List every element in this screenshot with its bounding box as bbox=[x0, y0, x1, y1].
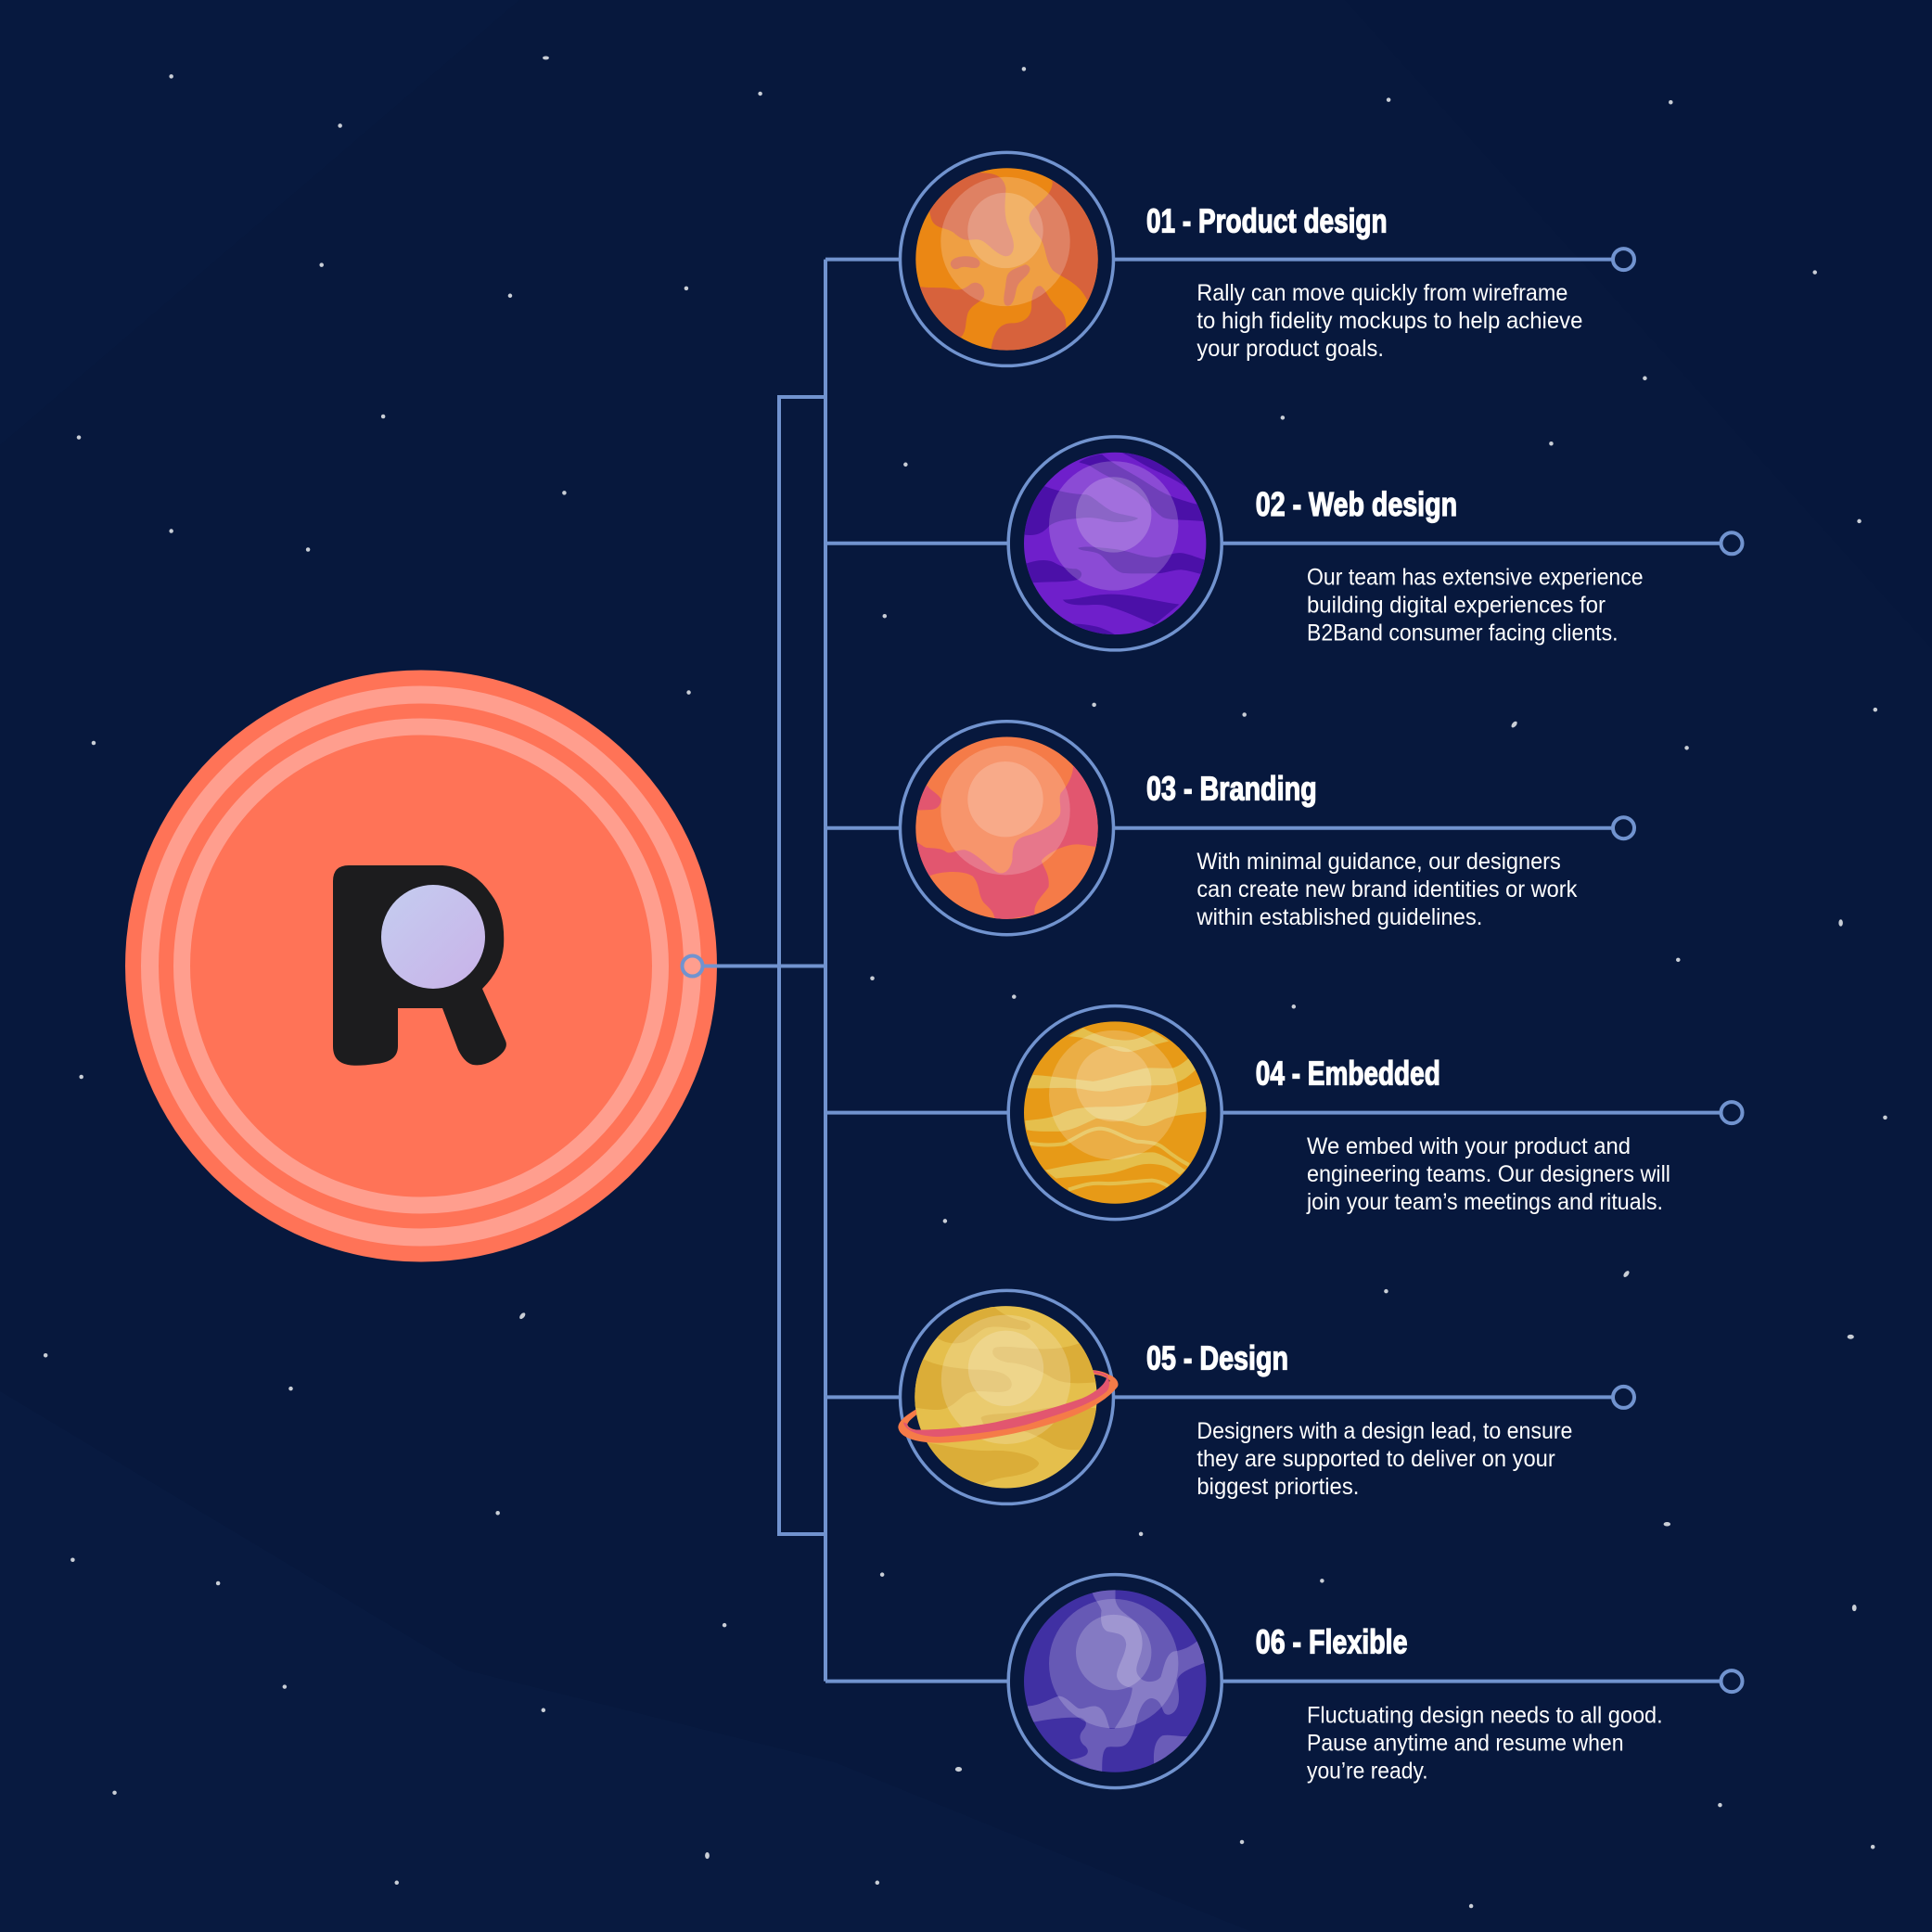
planet: orange bbox=[900, 152, 1113, 365]
description: biggest priorties. bbox=[1196, 1474, 1359, 1500]
description: Pause anytime and resume when bbox=[1307, 1731, 1623, 1757]
central sun badge with logo bbox=[125, 670, 717, 1261]
description: Fluctuating design needs to all good. bbox=[1307, 1703, 1663, 1729]
item 02: web design bbox=[1008, 437, 1742, 650]
connector line bbox=[1113, 826, 1613, 830]
description bbox=[1196, 849, 1578, 930]
heading: 06 - Flexible bbox=[1256, 1623, 1408, 1661]
item 05: design bbox=[898, 1290, 1634, 1503]
heading: 04 - Embedded bbox=[1256, 1055, 1440, 1093]
item 04: embedded bbox=[1008, 1006, 1742, 1220]
description bbox=[1307, 564, 1644, 646]
description: engineering teams. Our designers will bbox=[1307, 1161, 1670, 1187]
connector line bbox=[1222, 542, 1721, 545]
description: Rally can move quickly from wireframe bbox=[1196, 280, 1567, 306]
item 01: product design bbox=[900, 152, 1634, 365]
description: join your team’s meetings and rituals. bbox=[1306, 1189, 1663, 1215]
description: they are supported to deliver on your bbox=[1196, 1446, 1555, 1472]
planet: ringed gold bbox=[898, 1290, 1119, 1503]
connector tree bbox=[683, 260, 1010, 1682]
heading: 05 - Design bbox=[1146, 1338, 1288, 1376]
end circle bbox=[1721, 1670, 1742, 1692]
item 03: branding bbox=[900, 722, 1634, 935]
planet: indigo bbox=[1008, 1575, 1222, 1788]
description: to high fidelity mockups to help achieve bbox=[1196, 308, 1582, 334]
end circle bbox=[1613, 249, 1634, 270]
description bbox=[1196, 1418, 1572, 1500]
planet: purple bbox=[1008, 437, 1222, 650]
description bbox=[1196, 280, 1582, 362]
description: With minimal guidance, our designers bbox=[1196, 849, 1561, 875]
description: B2Band consumer facing clients. bbox=[1307, 620, 1618, 646]
description: your product goals. bbox=[1196, 336, 1384, 362]
description: We embed with your product and bbox=[1307, 1133, 1631, 1159]
heading: 02 - Web design bbox=[1256, 485, 1457, 523]
connector line bbox=[1222, 1680, 1721, 1683]
planet: amber striped bbox=[1008, 1006, 1222, 1220]
description: Our team has extensive experience bbox=[1307, 564, 1644, 590]
planet: coral bbox=[900, 722, 1113, 935]
logo R bbox=[333, 865, 506, 1066]
description: building digital experiences for bbox=[1307, 592, 1606, 618]
description bbox=[1307, 1703, 1663, 1785]
connector line bbox=[1113, 1395, 1613, 1399]
end circle bbox=[1613, 817, 1634, 838]
item 06: flexible bbox=[1008, 1575, 1742, 1788]
description: you’re ready. bbox=[1307, 1759, 1428, 1785]
planet ring front bbox=[898, 1375, 1119, 1443]
description: within established guidelines. bbox=[1196, 904, 1482, 930]
heading: 01 - Product design bbox=[1146, 202, 1388, 240]
end circle bbox=[1721, 1102, 1742, 1123]
connector line bbox=[1222, 1111, 1721, 1115]
end circle bbox=[1613, 1387, 1634, 1408]
description: Designers with a design lead, to ensure bbox=[1196, 1418, 1572, 1444]
connector line bbox=[1113, 258, 1613, 262]
description: can create new brand identities or work bbox=[1196, 876, 1578, 902]
heading: 03 - Branding bbox=[1146, 770, 1317, 808]
description bbox=[1306, 1133, 1670, 1215]
end circle bbox=[1721, 532, 1742, 554]
